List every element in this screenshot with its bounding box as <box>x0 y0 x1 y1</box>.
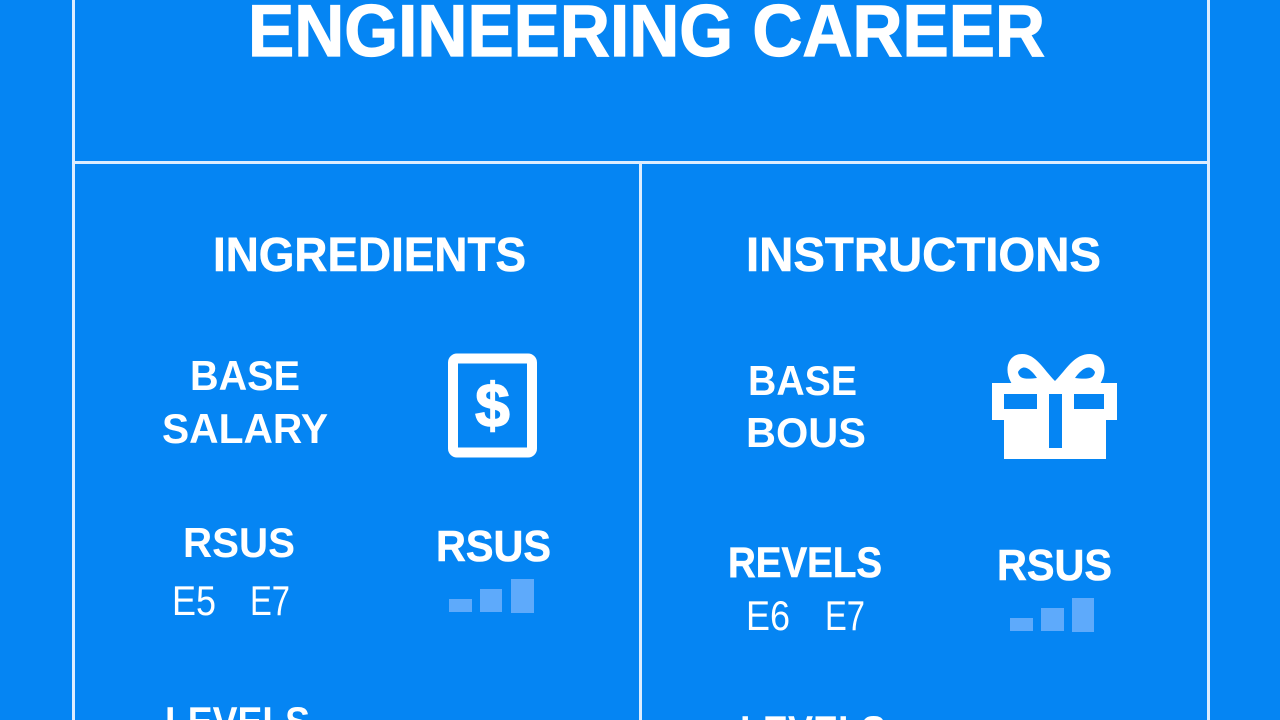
text: base salary <box>162 352 328 452</box>
text: RSUs E5 E7: RSUS <box>183 519 295 566</box>
text: revels E6 E7: REVELS <box>728 539 882 587</box>
icon: gift box <box>992 354 1117 459</box>
text: revels E6 E7: E6 <box>746 592 790 639</box>
label: RSUs: RSUS <box>997 541 1112 590</box>
text: base bonus: BASE <box>748 357 857 404</box>
text: revels E6 E7: E7 <box>825 592 865 639</box>
heading: ingredients: INGREDIENTS <box>213 229 526 282</box>
text: base salary: SALARY <box>162 405 328 452</box>
panel: instructions <box>728 229 1117 720</box>
text: base bonus: BOUS <box>746 409 866 456</box>
icon: dollar card: $ <box>475 372 510 441</box>
text: revels E6 E7 <box>728 539 882 639</box>
icon: bar chart <box>449 579 534 613</box>
text: RSUs E5 E7: E7 <box>250 577 290 624</box>
text: RSUs E5 E7: E5 <box>172 577 216 624</box>
text: RSUs E5 E7 <box>172 519 295 624</box>
icon: dollar card <box>453 358 532 452</box>
label: RSUs: RSUS <box>436 522 551 571</box>
icon: bar chart <box>1010 598 1094 632</box>
text: base salary: BASE <box>190 352 300 399</box>
panel: ingredients <box>162 229 551 720</box>
text: base bonus <box>746 357 866 456</box>
heading: instructions: INSTRUCTIONS <box>746 229 1101 282</box>
